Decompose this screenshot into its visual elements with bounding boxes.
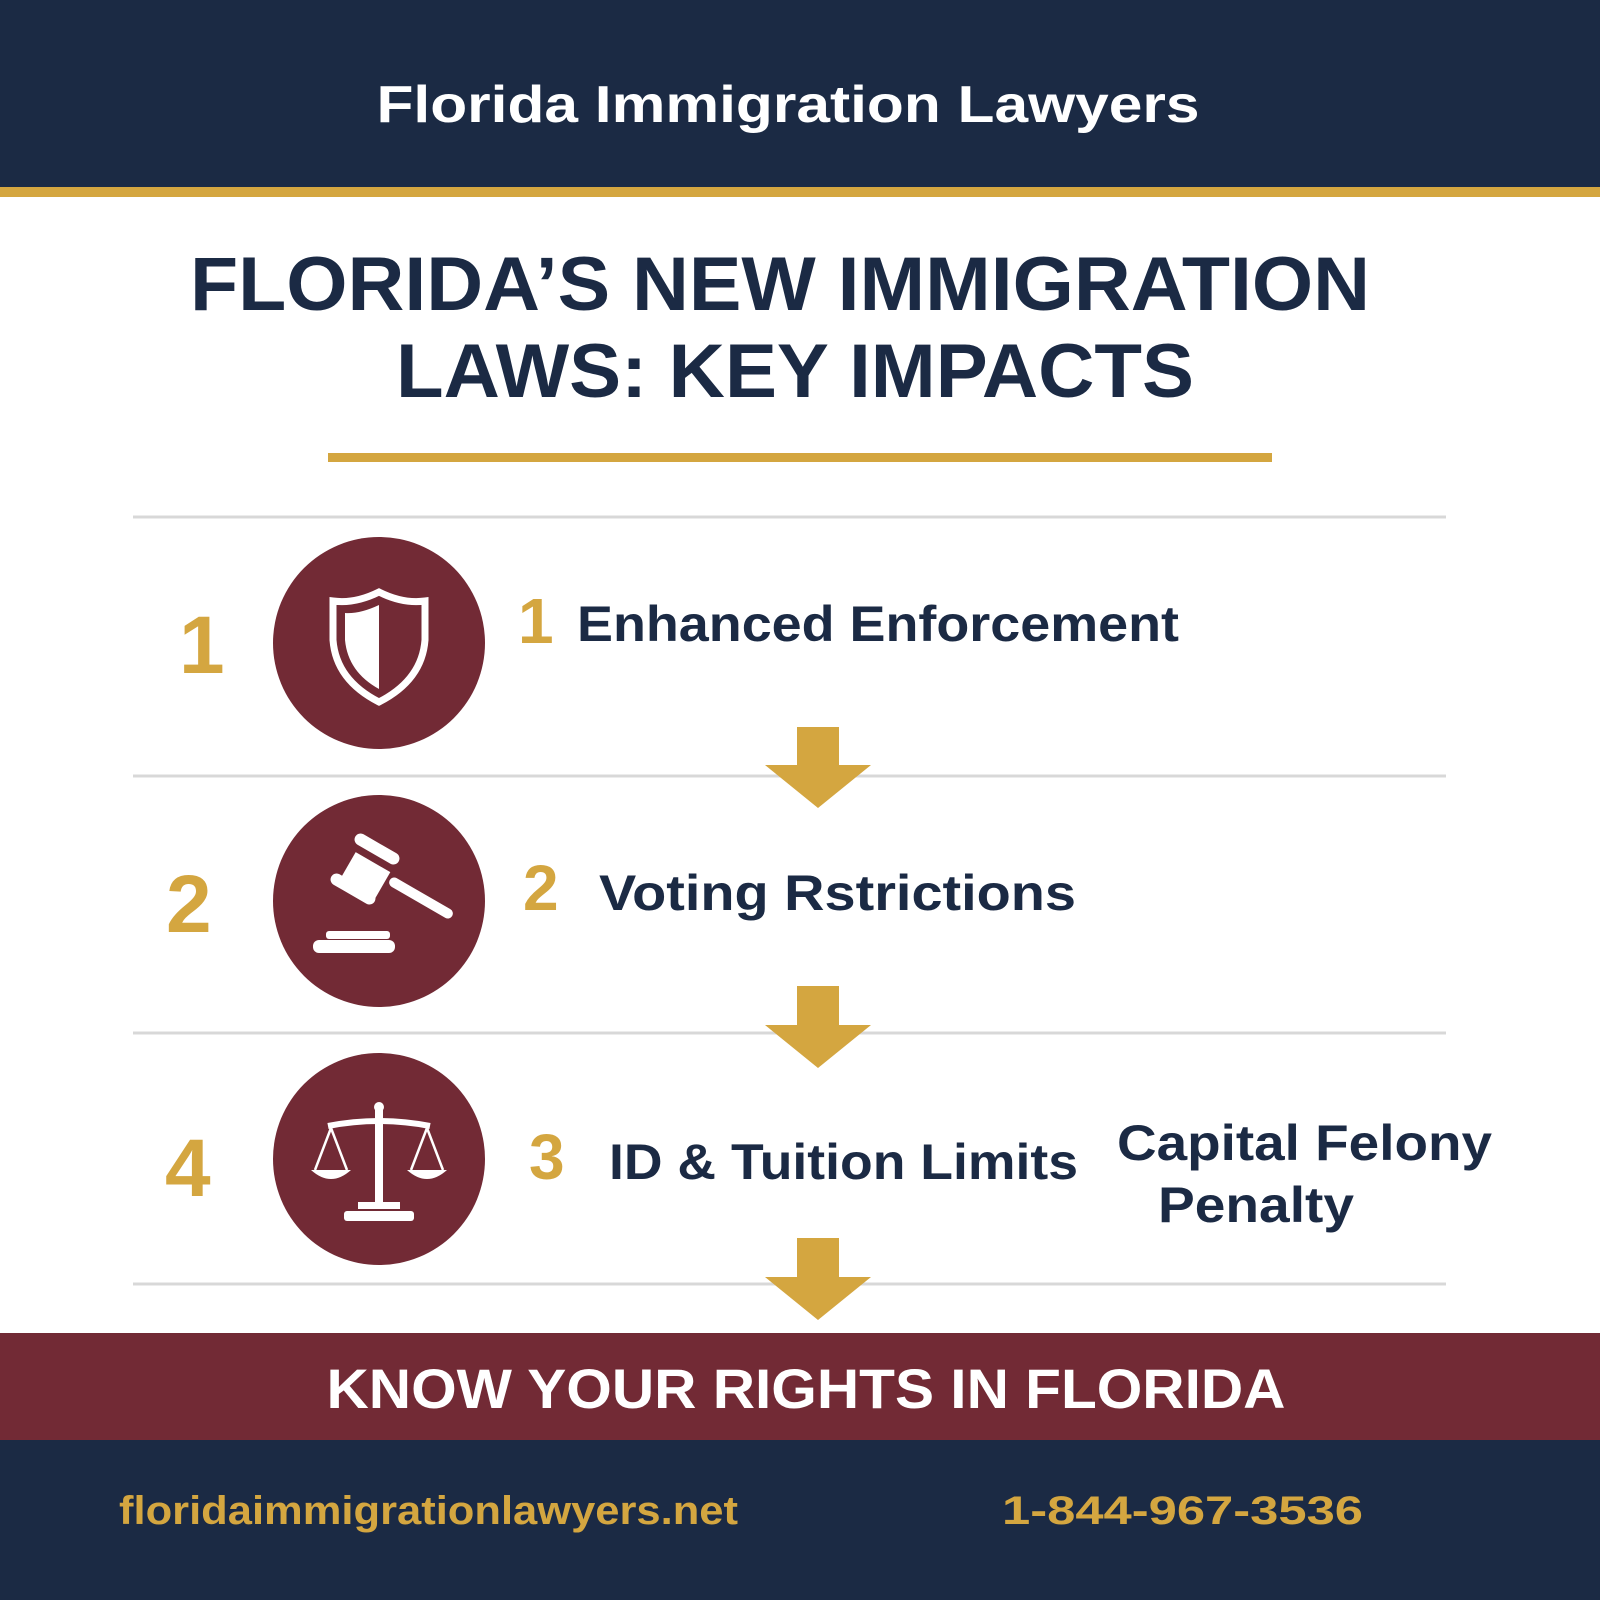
main title: FLORIDA’S NEW IMMIGRATION	[190, 242, 1370, 327]
capital felony penalty text: Penalty	[1158, 1177, 1354, 1233]
banner: know your rights	[0, 1333, 1600, 1440]
row 2: voting restrictions: 2	[523, 852, 559, 924]
footer: 1-844-967-3536	[1002, 1489, 1363, 1533]
arrow 3	[765, 1238, 871, 1320]
row 3: ID and tuition limits: ID & Tuition Limits	[609, 1134, 1078, 1190]
number 1: 1	[179, 600, 225, 691]
arrow 2	[765, 986, 871, 1068]
row 2: voting restrictions: 2	[166, 859, 212, 950]
main title: LAWS: KEY IMPACTS	[396, 329, 1194, 414]
banner: know your rights: KNOW YOUR RIGHTS IN FLORIDA	[326, 1357, 1286, 1420]
row 3: ID and tuition limits: 3	[529, 1121, 565, 1193]
row 3: ID and tuition limits	[165, 1053, 1078, 1265]
footer	[0, 1440, 1600, 1600]
row 1: enhanced enforcement	[179, 537, 1179, 749]
header bar	[0, 0, 1600, 197]
footer: floridaimmigrationlawyers.net	[119, 1489, 738, 1533]
capital felony penalty text	[1117, 1115, 1492, 1233]
row 3: ID and tuition limits: 4	[165, 1123, 211, 1214]
icon: scales	[273, 1053, 485, 1265]
row 1: enhanced enforcement: 1	[518, 585, 554, 657]
row 1: enhanced enforcement: Enhanced Enforcement	[577, 596, 1179, 652]
row 2: voting restrictions	[166, 795, 1076, 1007]
row 2: voting restrictions: Voting Rstrictions	[599, 865, 1076, 921]
arrow 1	[765, 727, 871, 808]
icon: shield	[273, 537, 485, 749]
main title	[190, 242, 1370, 414]
header title: Florida Immigration Lawyers	[376, 76, 1200, 134]
capital felony penalty text: Capital Felony	[1117, 1115, 1492, 1171]
icon: gavel	[273, 795, 485, 1007]
title underline	[328, 453, 1272, 462]
